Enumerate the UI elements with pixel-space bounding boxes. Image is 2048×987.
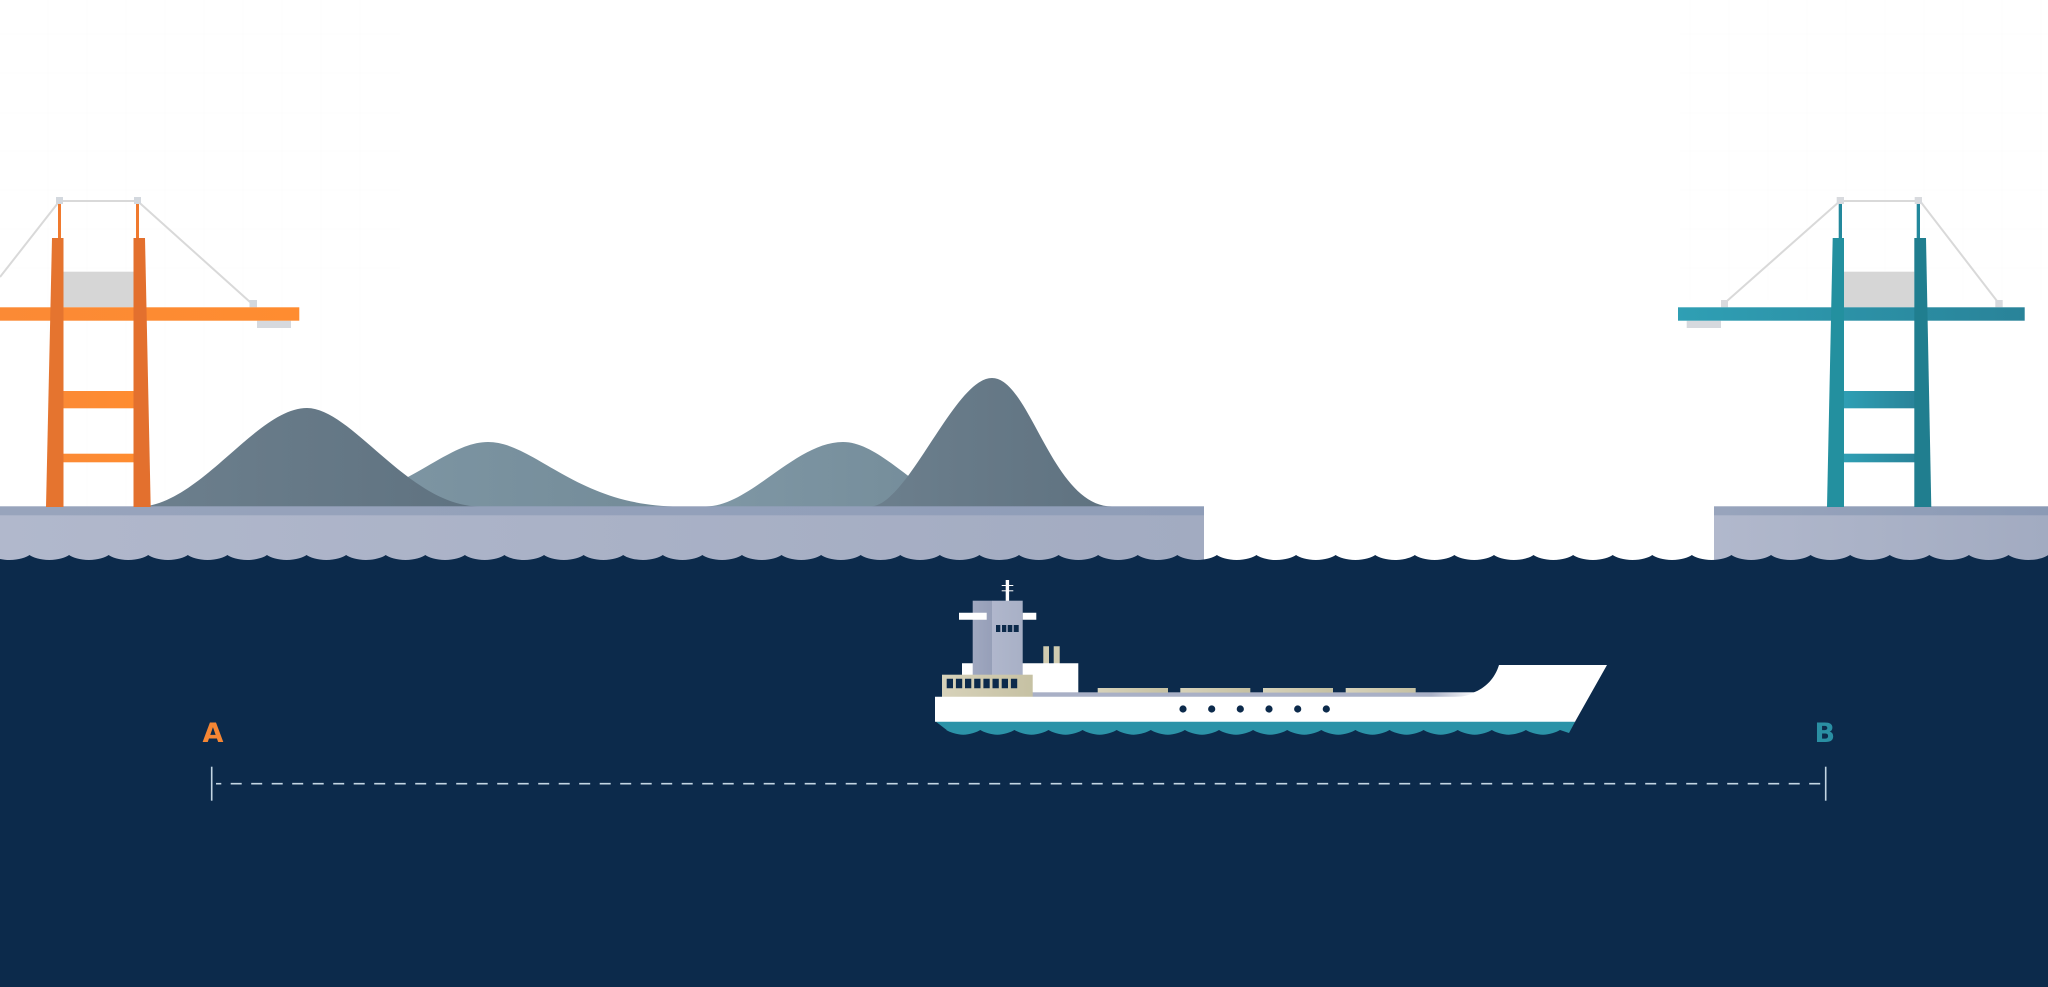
- teal crane: cables: [1727, 201, 1997, 301]
- orange crane: cables: [0, 201, 250, 302]
- left pier: [0, 506, 1204, 563]
- hill: light left: [297, 442, 679, 506]
- teal crane: boom pulleys: [1721, 300, 2003, 307]
- ship: cabin windows: [947, 679, 1017, 688]
- label B: B: [1814, 718, 1835, 749]
- orange crane: upper rung: [63, 391, 134, 408]
- orange crane: lower rung: [63, 454, 134, 462]
- ship: bridge windows: [996, 625, 1019, 632]
- teal crane: masts: [1839, 203, 1920, 238]
- orange crane (A): [0, 197, 299, 507]
- ship: tower dark side: [973, 601, 992, 675]
- ship: funnels: [1043, 646, 1060, 664]
- teal crane: top pulleys: [1837, 197, 1922, 204]
- ship: portholes: [1179, 705, 1330, 713]
- right pier: [1714, 506, 2048, 563]
- teal crane: suspended container: [1844, 272, 1914, 307]
- teal crane: left leg: [1827, 238, 1844, 507]
- orange crane: boom: [0, 307, 299, 321]
- hill: light right: [680, 442, 975, 506]
- orange crane: left leg: [46, 238, 64, 507]
- hill: dark left: [145, 408, 480, 506]
- teal crane: boom load: [1687, 321, 1721, 328]
- ship: white deckhouse: [962, 663, 1078, 696]
- ship: [935, 580, 1607, 735]
- teal crane: upper rung: [1844, 391, 1915, 408]
- ship: waterline band: [935, 721, 1576, 735]
- ship: mast: [1002, 580, 1013, 601]
- hill: dark right: [870, 378, 1112, 506]
- label A: A: [202, 718, 224, 749]
- orange crane: suspended container: [64, 272, 134, 307]
- orange crane: boom load: [257, 321, 291, 328]
- orange crane: right leg: [134, 238, 151, 507]
- ship: tower light side: [992, 601, 1023, 675]
- orange crane: masts: [58, 203, 139, 238]
- teal crane: lower rung: [1844, 454, 1915, 462]
- teal crane: right leg: [1914, 238, 1931, 507]
- orange crane: top pulleys: [56, 197, 141, 204]
- ship: beige cabin: [942, 675, 1033, 697]
- orange crane: boom pulley: [250, 300, 257, 307]
- ship: deck strip: [1032, 692, 1476, 697]
- teal crane (B): [1678, 197, 2025, 507]
- distance line A to B: [212, 767, 1826, 801]
- sea with scalloped waves: [0, 555, 2048, 987]
- ship: bridge wings: [959, 613, 1036, 620]
- ship: white hull: [935, 665, 1607, 722]
- teal crane: boom: [1678, 307, 2025, 321]
- ship: cargo tanks: [1098, 688, 1416, 693]
